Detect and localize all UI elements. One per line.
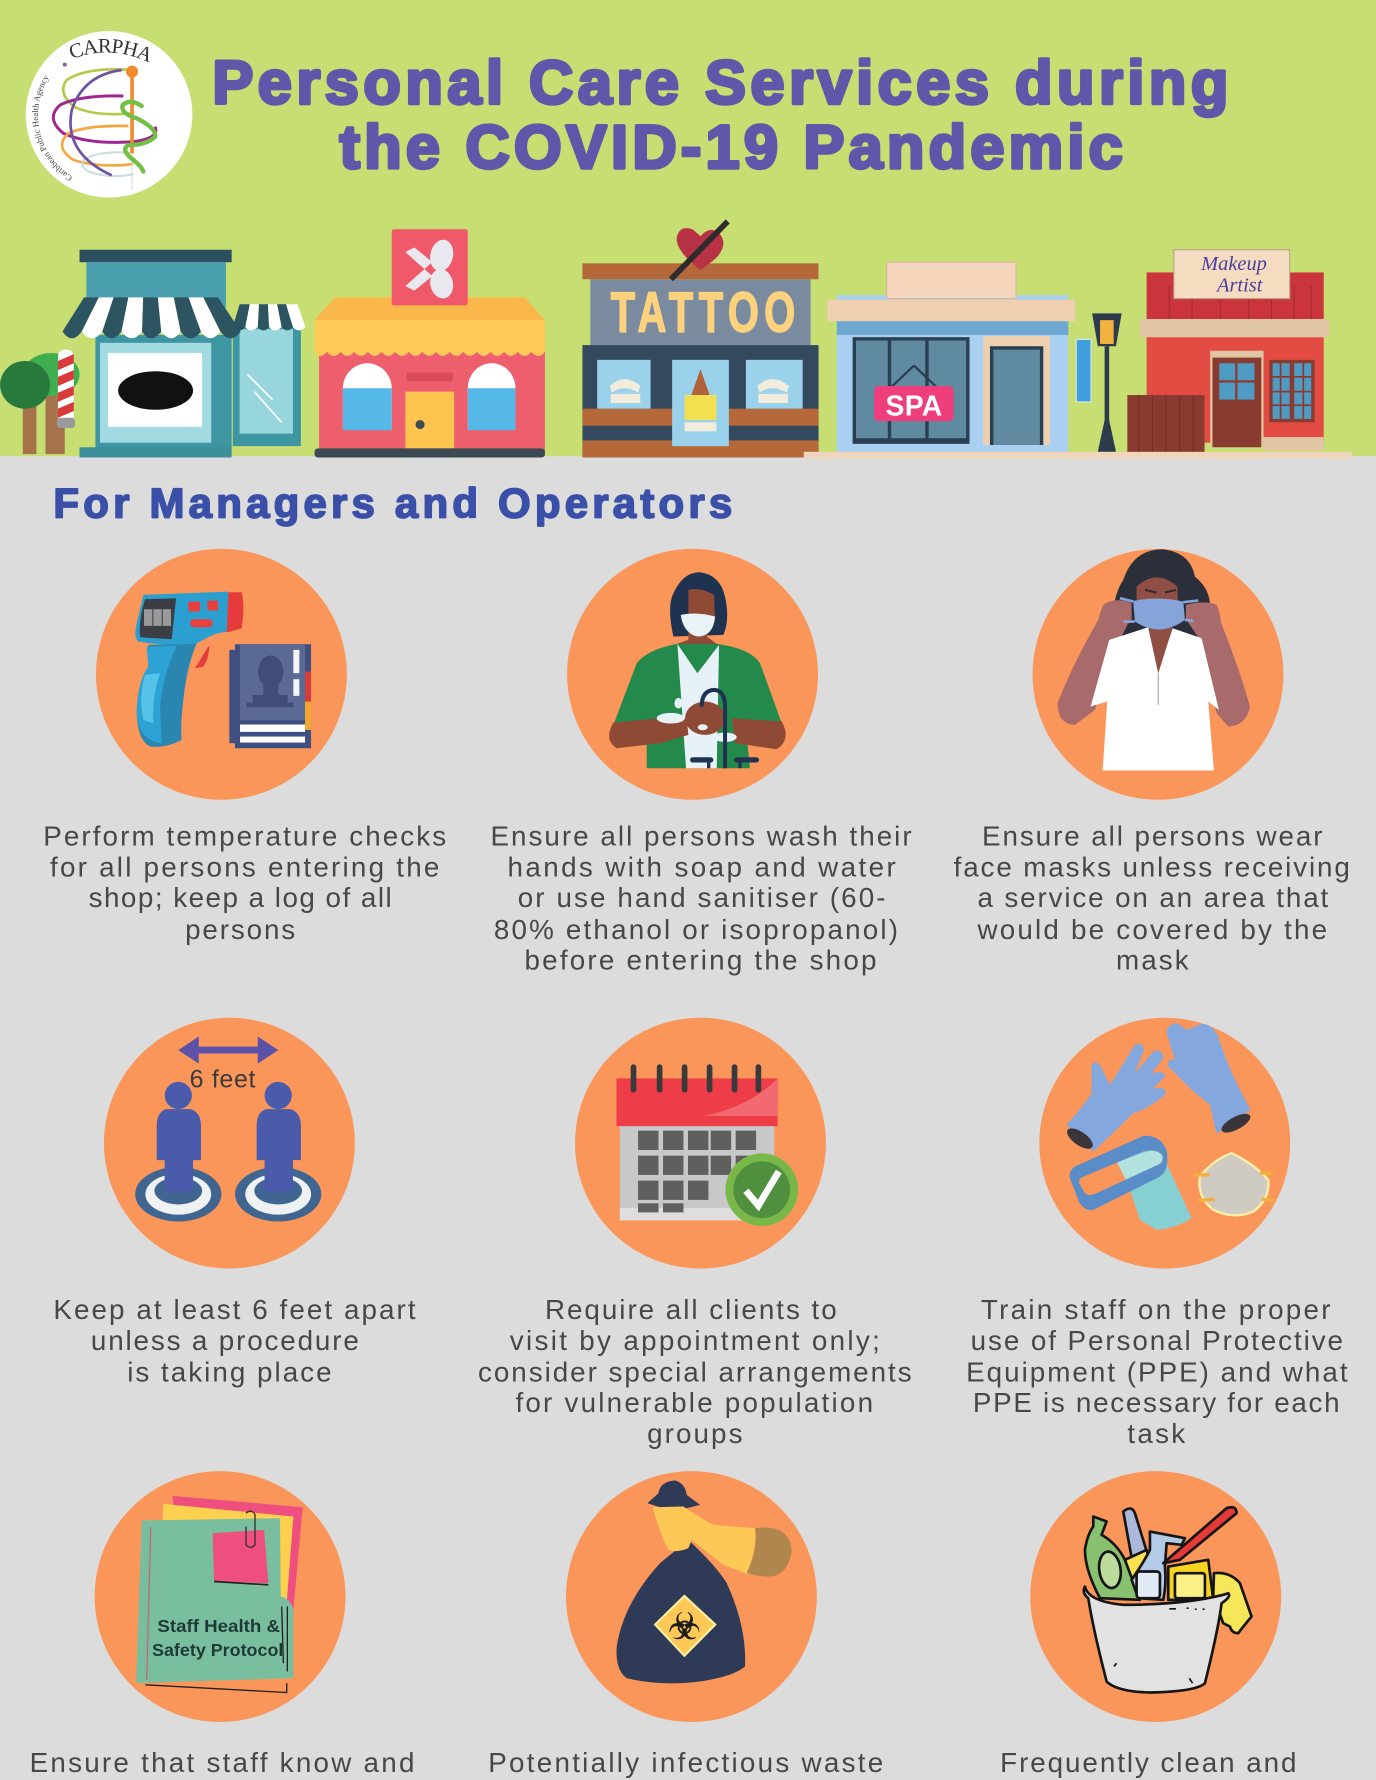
shop: makeup artist: Artist: [1215, 275, 1264, 297]
text: hand washing: Ensure all persons wash their: [490, 821, 912, 852]
text: PPE training: Train staff on the proper: [981, 1294, 1331, 1325]
panel: temperature checks: [43, 549, 446, 945]
text: temperature checks: shop; keep a log of all: [89, 882, 392, 913]
text: distancing: [53, 1294, 416, 1388]
street lamp: [1092, 313, 1122, 452]
text: face masks: mask: [1116, 944, 1189, 975]
panel: staff protocol: [30, 1471, 414, 1778]
logo: CARPHA: [26, 31, 192, 198]
text: appointments: for vulnerable population: [515, 1387, 873, 1418]
text: cleaning: Frequently clean and: [1000, 1747, 1296, 1778]
icon: calendar with check: [575, 1018, 826, 1269]
text: face masks: face masks unless receiving: [954, 851, 1350, 882]
text: distancing: Keep at least 6 feet apart: [53, 1294, 416, 1325]
panel: PPE training: [966, 1018, 1348, 1449]
shop: tattoo: [582, 221, 819, 457]
text: temperature checks: Perform temperature checks: [43, 821, 446, 852]
shop: spa: SPA: [886, 390, 942, 422]
panel: face masks: [954, 549, 1350, 975]
text: hand washing: or use hand sanitiser (60-: [518, 882, 886, 913]
text: face masks: Ensure all persons wear: [982, 821, 1323, 852]
icon: thermometer and log book: [96, 549, 347, 800]
text: appointments: consider special arrangements: [478, 1357, 912, 1388]
shop: hair salon: [315, 229, 545, 457]
shop: spa: [804, 262, 1352, 459]
text: face masks: [954, 821, 1350, 975]
icon: bucket of cleaning supplies: [1030, 1471, 1281, 1722]
icon: gloves, face shield, mask: [1039, 1018, 1290, 1269]
text: temperature checks: [43, 821, 446, 945]
text: face masks: a service on an area that: [977, 882, 1329, 913]
logo: CARPHA: CARPHA: [70, 39, 150, 62]
icon: protocol folder: Staff Health &: [157, 1616, 280, 1636]
text: PPE training: [966, 1294, 1348, 1449]
text: appointments: visit by appointment only;: [510, 1325, 880, 1356]
title: the COVID-19 Pandemic: [339, 113, 1123, 181]
title: Personal Care Services during: [212, 48, 1228, 116]
shop: makeup artist: Makeup: [1200, 253, 1267, 275]
text: PPE training: use of Personal Protective: [971, 1325, 1343, 1356]
text: distancing: unless a procedure: [91, 1325, 359, 1356]
text: appointments: groups: [647, 1418, 742, 1449]
icon: protocol folder: Safety Protocol: [152, 1640, 283, 1660]
shop: tattoo: TATTOO: [611, 282, 795, 344]
icon: woman wearing mask: [1033, 549, 1283, 800]
text: hand washing: [490, 821, 912, 975]
text: appointments: [478, 1294, 912, 1449]
title: [212, 48, 1228, 181]
icon: protocol folder: [95, 1471, 346, 1722]
icon: two people 6 feet apart: [104, 1018, 355, 1269]
logo: CARPHA: Caribbean Public Health Agency: [32, 75, 72, 180]
icon: two people 6 feet apart: 6 feet: [190, 1066, 256, 1094]
icon: scissors: [405, 238, 456, 301]
text: temperature checks: for all persons entering the: [50, 851, 439, 882]
text: appointments: Require all clients to: [545, 1294, 837, 1325]
panel: appointments: [478, 1018, 912, 1449]
text: hand washing: 80% ethanol or isopropanol): [494, 914, 898, 945]
text: hand washing: hands with soap and water: [508, 851, 896, 882]
header background: [0, 0, 1376, 456]
text: face masks: would be covered by the: [976, 914, 1327, 945]
text: staff protocol: Ensure that staff know and: [30, 1747, 414, 1778]
text: PPE training: task: [1127, 1418, 1185, 1449]
illustration: shop street: [0, 221, 1352, 459]
body background: [0, 456, 1376, 1780]
shop: barber: [63, 250, 305, 457]
icon: biohazard bag held by gloved hand: [566, 1471, 817, 1722]
shop: makeup artist: [1127, 250, 1329, 452]
panel: distancing: [53, 1018, 416, 1388]
icon: biohazard bag held by gloved hand: ☣: [668, 1605, 701, 1648]
text: PPE training: PPE is necessary for each: [973, 1387, 1340, 1418]
text: PPE training: Equipment (PPE) and what: [966, 1357, 1348, 1388]
heart and dart: [671, 221, 728, 279]
text: hand washing: before entering the shop: [525, 944, 876, 975]
panel: cleaning: [1000, 1471, 1296, 1778]
trees and barber pole: [0, 350, 80, 454]
icon: woman washing hands: [567, 549, 818, 800]
text: infectious waste: Potentially infectious waste: [488, 1747, 883, 1778]
text: distancing: is taking place: [127, 1357, 332, 1388]
panel: infectious waste: [488, 1471, 883, 1778]
heading: For Managers and Operators: [53, 480, 732, 527]
panel: hand washing: [490, 549, 912, 975]
text: temperature checks: persons: [185, 914, 295, 945]
